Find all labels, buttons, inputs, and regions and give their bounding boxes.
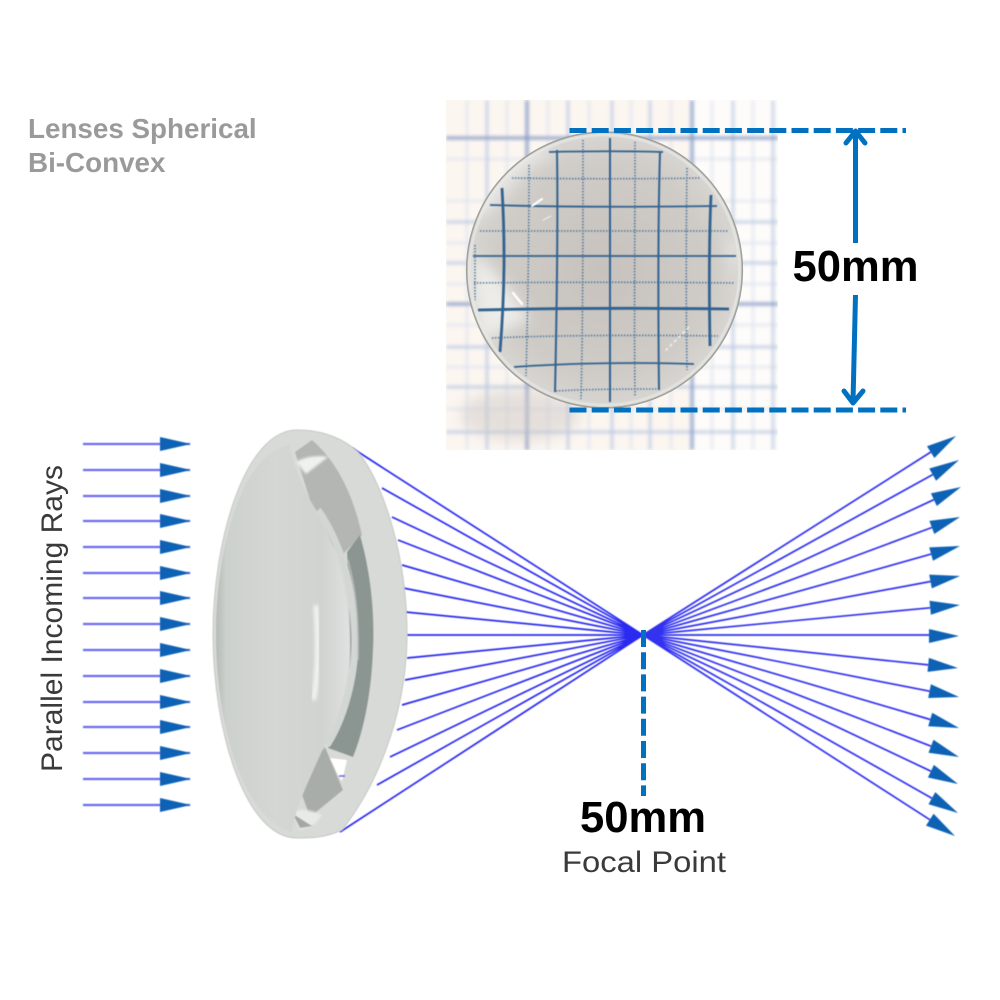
front face	[216, 445, 349, 832]
label: 50mm	[792, 243, 919, 291]
incoming rays label: Parallel Incoming Rays	[36, 465, 69, 772]
cavity upper	[295, 440, 362, 560]
converging rays	[340, 448, 643, 832]
lens disc	[460, 130, 742, 441]
dotted grid lines	[474, 140, 735, 399]
lens illustration	[213, 430, 407, 838]
cavity lower	[302, 747, 343, 813]
title: Bi-Convex	[28, 147, 166, 178]
cavity highlight top	[296, 456, 328, 474]
photo: lens on grid paper	[446, 100, 778, 450]
focal point label: Focal Point	[562, 846, 727, 879]
parallel incoming arrows	[83, 437, 191, 812]
title: Lenses Spherical	[28, 113, 257, 144]
focal point dashed line	[641, 630, 646, 796]
double arrow	[844, 131, 865, 403]
highlights	[248, 590, 318, 700]
dashed extent lines	[570, 130, 906, 410]
rim and body	[213, 430, 407, 838]
glints	[513, 199, 690, 350]
grid paper background	[446, 100, 778, 450]
cavity	[292, 440, 373, 830]
cavity dark	[328, 535, 373, 757]
focal distance label: 50mm	[580, 794, 706, 842]
dimension: 50mm lens diameter	[570, 130, 919, 410]
diverging rays with arrowheads	[643, 436, 961, 836]
inner glass ring	[318, 510, 355, 745]
solid grid lines	[473, 138, 736, 402]
white notch	[330, 758, 347, 781]
